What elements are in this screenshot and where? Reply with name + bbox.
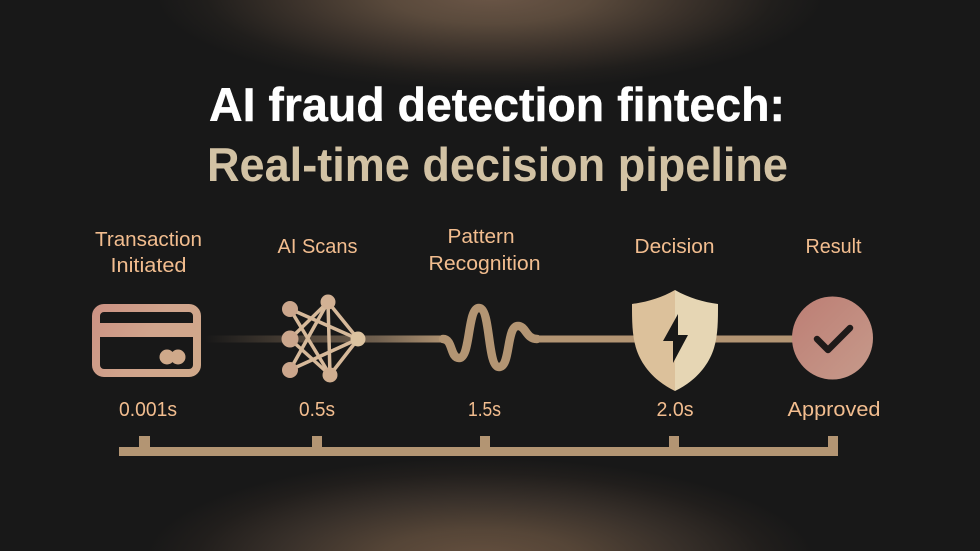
icon: shield with bolt xyxy=(632,290,718,391)
title xyxy=(207,78,788,191)
step: Result xyxy=(788,236,880,421)
time: 2.0s xyxy=(656,399,694,421)
icon: approved check xyxy=(792,296,873,380)
title line 1: AI fraud detection fintech: xyxy=(209,78,785,131)
icon: credit card xyxy=(96,308,197,373)
icon: waveform xyxy=(443,308,537,367)
label: AI Scans xyxy=(278,236,358,258)
label: Transaction xyxy=(95,229,202,251)
label line 2: Recognition xyxy=(428,253,540,275)
step: Pattern Recognition xyxy=(428,226,540,421)
step: Transaction Initiated xyxy=(95,229,202,421)
step: Decision xyxy=(632,236,718,421)
time: 1.5s xyxy=(468,399,501,421)
time: 0.5s xyxy=(299,399,335,421)
icon: neural network xyxy=(282,294,366,382)
result text: Approved xyxy=(788,399,880,421)
time: 0.001s xyxy=(119,399,177,421)
connector line xyxy=(205,336,800,342)
timeline bar with ticks xyxy=(119,436,838,456)
label line 2: Initiated xyxy=(110,255,186,277)
label: Result xyxy=(806,236,862,258)
label: Pattern xyxy=(448,226,514,248)
step: AI Scans xyxy=(278,236,366,421)
title line 2: Real-time decision pipeline xyxy=(207,138,788,191)
label: Decision xyxy=(634,236,714,258)
